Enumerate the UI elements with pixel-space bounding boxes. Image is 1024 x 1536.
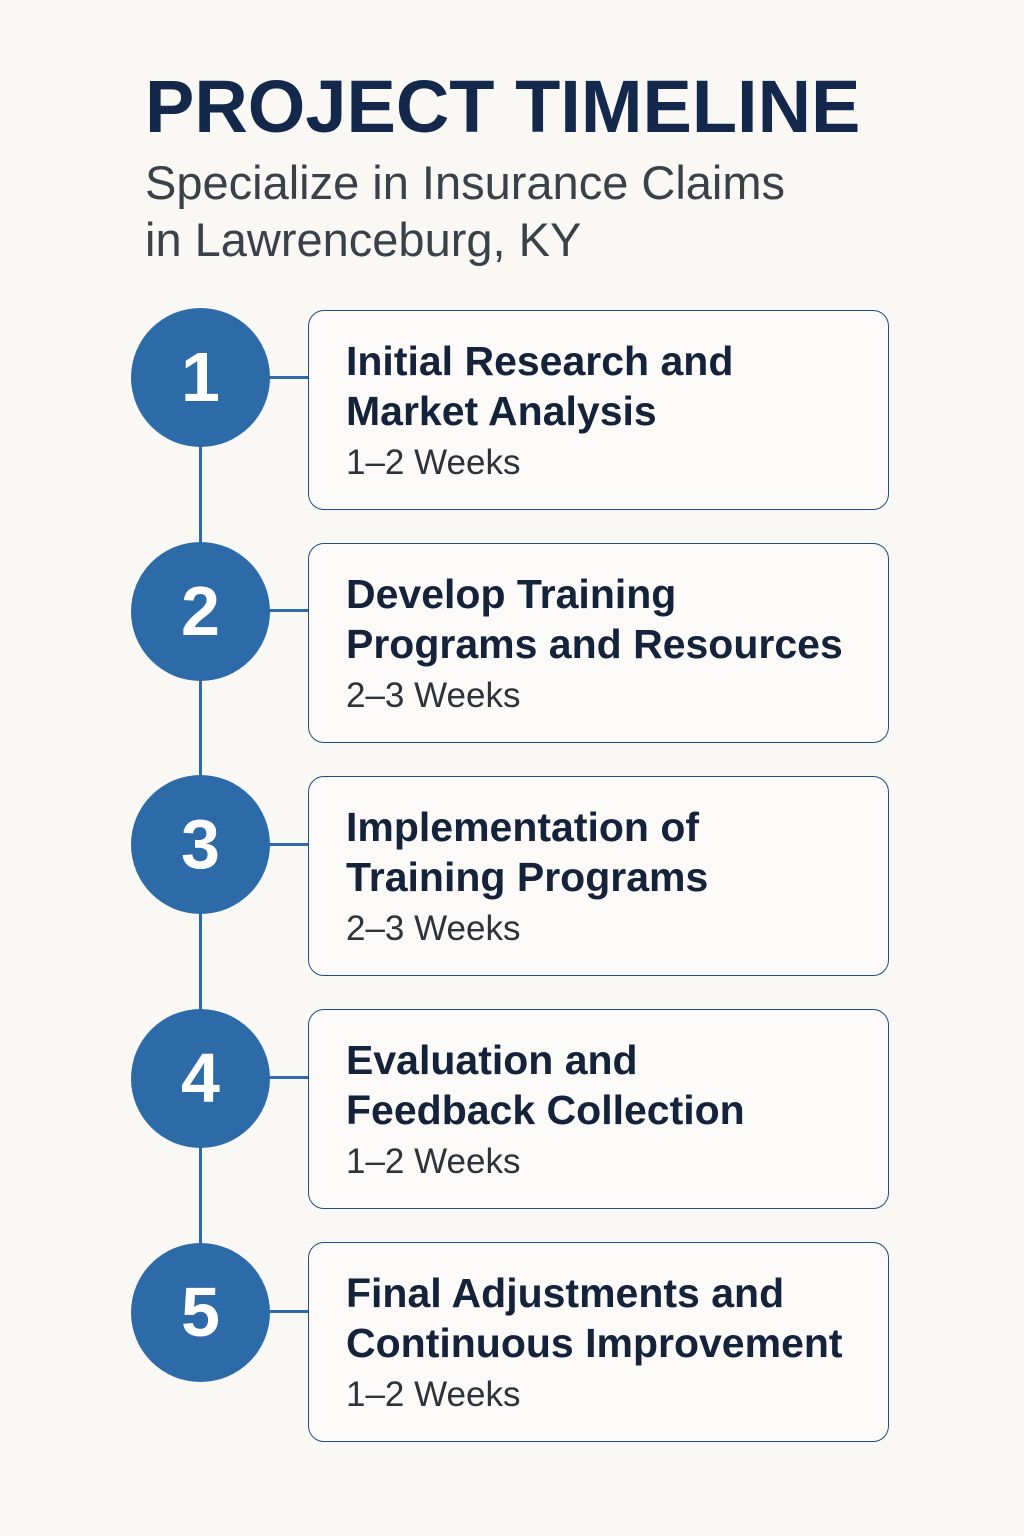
step 3 circle: 3 (181, 805, 220, 883)
step 2 card: Programs and Resources (346, 621, 843, 667)
step 3 card: 2–3 Weeks (346, 909, 520, 948)
step 5 card: 1–2 Weeks (346, 1375, 520, 1414)
timeline vertical line (199, 378, 202, 1312)
step 2 card: 2–3 Weeks (346, 676, 520, 715)
step 2 card: Develop Training (346, 571, 676, 617)
subtitle: in Lawrenceburg, KY (145, 213, 581, 266)
step 1 card: Initial Research and (346, 338, 733, 384)
step 1 card: Market Analysis (346, 388, 657, 434)
step 2 card (308, 543, 889, 743)
step 4 circle (131, 1009, 270, 1148)
step 2 connector (268, 609, 310, 612)
step 3 card: Training Programs (346, 854, 708, 900)
step 4 card: 1–2 Weeks (346, 1142, 520, 1181)
step 5 circle (131, 1243, 270, 1382)
title: PROJECT TIMELINE (145, 65, 860, 148)
step 4 circle: 4 (181, 1039, 220, 1117)
step 1 card (308, 310, 889, 510)
step 3 card (308, 776, 889, 976)
step 2 circle (131, 542, 270, 681)
step 1 card: 1–2 Weeks (346, 443, 520, 482)
step 1 connector (268, 376, 310, 379)
step 5 card: Final Adjustments and (346, 1270, 784, 1316)
step 4 card (308, 1009, 889, 1209)
step 1 circle (131, 308, 270, 447)
step 5 card: Continuous Improvement (346, 1320, 843, 1366)
step 5 card (308, 1242, 889, 1442)
step 4 connector (268, 1076, 310, 1079)
subtitle (145, 156, 785, 266)
step 5 connector (268, 1310, 310, 1313)
step 3 card: Implementation of (346, 804, 699, 850)
step 5 circle: 5 (181, 1273, 220, 1351)
subtitle: Specialize in Insurance Claims (145, 156, 785, 209)
step 3 connector (268, 843, 310, 846)
step 4 card: Feedback Collection (346, 1087, 745, 1133)
step 3 circle (131, 775, 270, 914)
step 1 circle: 1 (181, 338, 220, 416)
step 4 card: Evaluation and (346, 1037, 638, 1083)
step 2 circle: 2 (181, 572, 220, 650)
